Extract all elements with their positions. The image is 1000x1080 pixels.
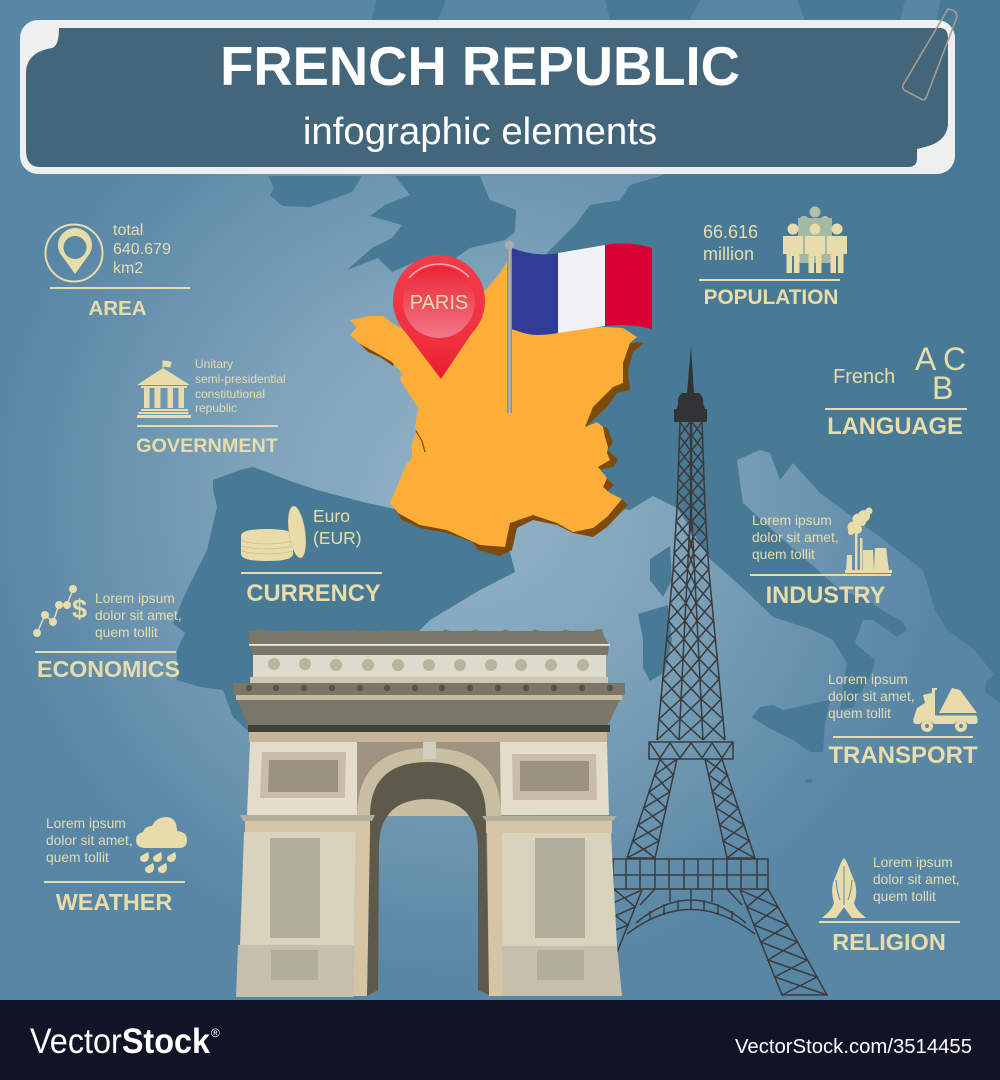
weather text: Lorem ipsum bbox=[46, 816, 126, 831]
area text: total bbox=[113, 222, 143, 239]
language heading: LANGUAGE bbox=[827, 414, 963, 440]
arch: spandrel bbox=[357, 742, 501, 816]
subtitle: infographic elements bbox=[303, 110, 657, 153]
land: continental Europe and Italy bbox=[510, 0, 1000, 710]
section: religion bbox=[819, 855, 960, 955]
population text: million bbox=[703, 244, 754, 264]
arch: top cornice bbox=[248, 629, 609, 655]
land: Sicily bbox=[752, 700, 830, 752]
panel border bbox=[20, 20, 955, 174]
arch: grey entablature bbox=[237, 700, 620, 725]
economics heading: ECONOMICS bbox=[37, 656, 180, 682]
weather text: quem tollit bbox=[46, 850, 109, 865]
icon: rain cloud bbox=[136, 817, 187, 873]
section: economics bbox=[33, 585, 182, 682]
section: language bbox=[825, 341, 967, 440]
currency text: Euro bbox=[313, 506, 350, 526]
language text: French bbox=[833, 366, 895, 388]
arch: left pier band bbox=[245, 821, 370, 832]
icon: growth chart with dollar: $ bbox=[72, 594, 87, 624]
area text: km2 bbox=[113, 260, 143, 277]
arch: attic frieze bbox=[253, 655, 606, 677]
arch: left pier side bbox=[353, 832, 370, 996]
area heading: AREA bbox=[88, 297, 147, 320]
arch: left pier panel bbox=[270, 838, 320, 938]
icon: paperclip bbox=[903, 9, 957, 100]
section: currency bbox=[241, 505, 382, 607]
government text: semi-presidential bbox=[195, 372, 286, 386]
map: France bbox=[350, 262, 644, 556]
arch: right pier cap bbox=[482, 816, 617, 821]
transport text: dolor sit amet, bbox=[828, 689, 915, 704]
arch: left pier face bbox=[240, 832, 356, 945]
arch: right relief inner bbox=[520, 761, 589, 791]
arch: white line bbox=[249, 644, 610, 646]
industry text: Lorem ipsum bbox=[752, 513, 832, 528]
arch: right base panel bbox=[537, 950, 584, 980]
land: Great Britain bbox=[347, 176, 516, 272]
pin highlight bbox=[409, 264, 469, 278]
lower legs and arch bbox=[585, 889, 827, 995]
middle legs bbox=[627, 759, 755, 858]
arch: tan band bbox=[249, 732, 607, 742]
government heading: GOVERNMENT bbox=[136, 435, 278, 457]
land: Spain bbox=[173, 467, 515, 733]
economics text: quem tollit bbox=[95, 625, 158, 640]
population text: 66.616 bbox=[703, 222, 758, 242]
arch: left pier base bbox=[236, 945, 354, 997]
second platform bbox=[613, 859, 768, 889]
flag blue stripe bbox=[512, 248, 558, 335]
economics text: dolor sit amet, bbox=[95, 608, 182, 623]
upper section lattice bbox=[657, 422, 725, 740]
industry heading: INDUSTRY bbox=[766, 583, 886, 609]
icon: location in circle bbox=[46, 224, 102, 282]
first platform bbox=[649, 742, 733, 759]
arch: right pier face bbox=[501, 833, 617, 946]
area text: 640.679 bbox=[113, 241, 171, 258]
truck cab and bed bbox=[913, 688, 978, 724]
economics text: Lorem ipsum bbox=[95, 591, 175, 606]
arch: band under frieze bbox=[250, 677, 608, 683]
icon: letters A B C: C bbox=[943, 341, 966, 377]
arch: left relief inner bbox=[268, 760, 338, 792]
arch: tan line bbox=[236, 695, 622, 700]
section: government bbox=[136, 357, 286, 457]
France shadow bbox=[360, 342, 644, 556]
footer logo: VectorStock bbox=[30, 1022, 210, 1061]
France body bbox=[350, 262, 637, 547]
arch: vault with opening bbox=[367, 762, 489, 996]
industry text: dolor sit amet, bbox=[752, 530, 839, 545]
icon: group of people bbox=[783, 206, 847, 273]
arch: left pier cap bbox=[240, 815, 375, 821]
icon: letters A B C: B bbox=[932, 370, 953, 406]
weather text: dolor sit amet, bbox=[46, 833, 133, 848]
arch: right pier base bbox=[502, 946, 622, 996]
arch: right pier side bbox=[487, 833, 503, 996]
arch: left upper block bbox=[247, 742, 357, 815]
religion text: dolor sit amet, bbox=[873, 872, 960, 887]
flag red stripe bbox=[605, 244, 652, 329]
transport heading: TRANSPORT bbox=[828, 742, 978, 769]
icon: government building bbox=[137, 361, 191, 418]
arch: cornice studs bbox=[246, 685, 613, 691]
land: northern fragments bbox=[372, 0, 905, 20]
title: FRENCH REPUBLIC bbox=[220, 36, 740, 97]
religion heading: RELIGION bbox=[832, 929, 946, 955]
population heading: POPULATION bbox=[704, 286, 838, 309]
flag white stripe bbox=[558, 245, 605, 333]
footer registered mark: ® bbox=[211, 1026, 220, 1040]
land: Corsica bbox=[650, 546, 672, 597]
government text: constitutional bbox=[195, 387, 265, 401]
arch: dark line bbox=[248, 725, 610, 732]
icon: coins bbox=[241, 505, 309, 561]
government text: republic bbox=[195, 401, 237, 415]
industry text: quem tollit bbox=[752, 547, 815, 562]
flag pole ball bbox=[505, 240, 514, 250]
transport text: Lorem ipsum bbox=[828, 672, 908, 687]
section: industry bbox=[750, 508, 892, 609]
footer url: VectorStock.com/3514455 bbox=[735, 1036, 972, 1058]
currency heading: CURRENCY bbox=[246, 581, 381, 607]
arch: right upper block bbox=[500, 742, 609, 815]
religion text: Lorem ipsum bbox=[873, 855, 953, 870]
pin label: PARIS bbox=[410, 292, 468, 314]
arch: vault ring bbox=[357, 748, 501, 816]
section: population bbox=[699, 206, 847, 309]
icon: letters A B C: A bbox=[915, 341, 937, 377]
panel fill with curled corners bbox=[26, 28, 948, 167]
arch: studded cornice bbox=[233, 683, 625, 695]
icon: praying hands bbox=[822, 858, 866, 918]
government text: Unitary bbox=[195, 357, 233, 371]
pin body bbox=[393, 255, 485, 379]
icon: dump truck bbox=[913, 688, 978, 732]
arch: right relief panel bbox=[512, 754, 597, 800]
section: weather bbox=[44, 816, 187, 915]
pin inner disc bbox=[403, 266, 475, 338]
arch: right pier band bbox=[486, 821, 612, 833]
currency text: (EUR) bbox=[313, 528, 362, 548]
arch: left relief panel bbox=[260, 752, 346, 798]
footer bar bbox=[0, 1000, 1000, 1080]
arch: frieze discs bbox=[268, 658, 589, 671]
section: area bbox=[46, 222, 190, 320]
weather heading: WEATHER bbox=[56, 889, 172, 915]
arch: right pier panel bbox=[535, 838, 585, 938]
Eiffel Tower bbox=[585, 346, 827, 995]
map pin: Paris bbox=[393, 255, 485, 379]
flag of France bbox=[505, 240, 652, 413]
map: surrounding land bbox=[173, 0, 1000, 783]
arch: left base panel bbox=[271, 950, 318, 980]
arch: keystone bbox=[423, 742, 436, 759]
flag pole bbox=[507, 246, 512, 413]
land: Ireland bbox=[268, 176, 362, 207]
land: Balkan fragment bbox=[985, 670, 1000, 703]
land: Sardinia bbox=[638, 605, 672, 681]
section: transport bbox=[828, 672, 978, 769]
land: Malta bbox=[805, 779, 813, 783]
Arc de Triomphe bbox=[233, 629, 625, 997]
icon: growth chart with dollar bbox=[33, 585, 87, 637]
transport text: quem tollit bbox=[828, 706, 891, 721]
header panel bbox=[20, 9, 957, 174]
France estuary mark bbox=[416, 431, 425, 452]
icon: factory bbox=[845, 508, 892, 573]
tower head and spire bbox=[674, 346, 707, 422]
truck load bbox=[939, 688, 977, 713]
religion text: quem tollit bbox=[873, 889, 936, 904]
